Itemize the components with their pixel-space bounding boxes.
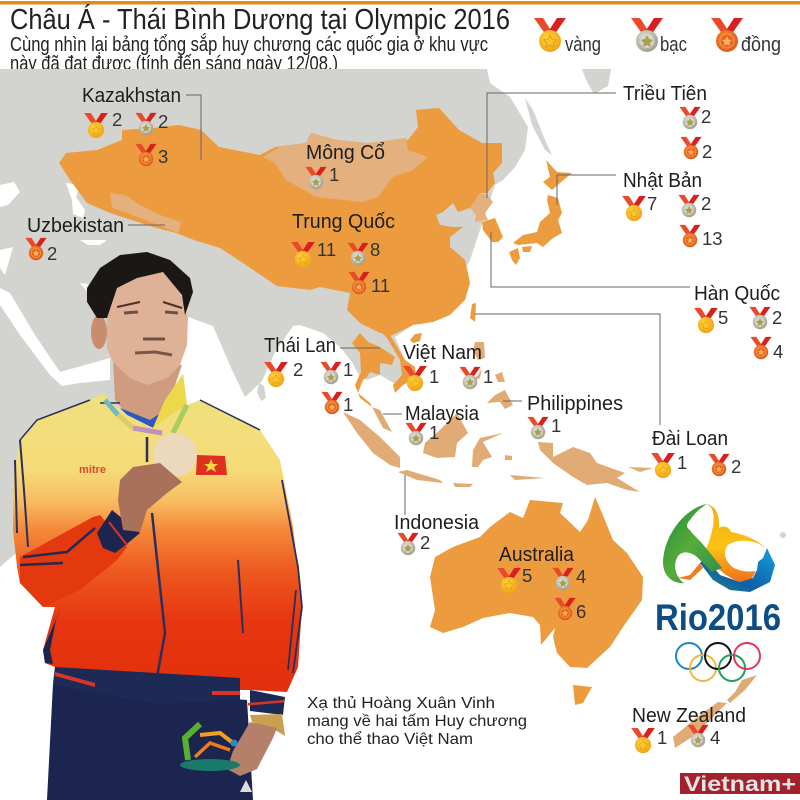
group: New Zealand: 1 (657, 727, 667, 748)
group: Australia: 4 (576, 566, 586, 587)
group: Indonesia: 2 (420, 532, 430, 553)
group: China: 11 (317, 239, 336, 260)
group: New Zealand: New Zealand (632, 705, 746, 727)
legend label silver: bạc (660, 34, 687, 56)
group: Australia: 6 (576, 601, 586, 622)
group: Malaysia: Malaysia (405, 403, 480, 425)
lower hand (227, 722, 277, 776)
group: Philippines: 1 (551, 415, 561, 436)
logo emblem (663, 504, 775, 592)
face features (117, 302, 182, 355)
map: seas (0, 182, 110, 386)
icon: bronze medal legend (711, 18, 743, 52)
cuff red stripe (109, 522, 127, 545)
icon: gold medal legend (534, 18, 566, 52)
forearm sleeve (20, 515, 127, 607)
group: Kazakhstan: Kazakhstan (82, 85, 181, 107)
group: Mongolia (305, 142, 385, 189)
group: South Korea: 2 (772, 307, 782, 328)
group: Thailand: 1 (343, 359, 353, 380)
group: Thailand: 2 (293, 359, 303, 380)
brand label: mitre (79, 464, 106, 476)
Vietnam+ logo: Vietnam+ (684, 773, 796, 796)
group: Malaysia (405, 403, 480, 445)
group: Japan (622, 170, 723, 249)
group: Australia (497, 544, 586, 622)
jacket stripes (15, 400, 302, 677)
subtitle: Cùng nhìn lại bảng tổng sắp huy chương các quốc gia ở khu vực (10, 33, 488, 56)
group: Kazakhstan (82, 85, 181, 167)
head: hair (87, 252, 193, 318)
top orange bar (0, 1, 800, 4)
map: Philippines (470, 342, 513, 409)
map: Malaysia and Indonesia (343, 407, 653, 492)
collar right (153, 374, 187, 428)
group: Japan: 7 (647, 193, 657, 214)
group: Kazakhstan: 3 (158, 146, 168, 167)
map: Uzbekistan (110, 193, 181, 233)
caption: Xạ thủ Hoàng Xuân Vinh (307, 695, 495, 712)
blue undershirt (120, 408, 162, 428)
right cuff stripe (248, 700, 284, 706)
olympic medal (153, 433, 197, 477)
subtitle: này đã đạt được (tính đến sáng ngày 12/08.) (10, 53, 338, 75)
legend label gold: vàng (565, 34, 601, 56)
group: Thailand: Thái Lan (264, 335, 336, 357)
title: Châu Á - Thái Bình Dương tại Olympic 2016 (10, 3, 510, 36)
group: Taiwan (651, 428, 741, 478)
group: Vietnam: 1 (429, 366, 439, 387)
group: South Korea: Hàn Quốc (694, 283, 780, 305)
pants (47, 684, 253, 800)
map: China, Kazakhstan and neighbours (59, 108, 502, 336)
group: Australia: Australia (499, 544, 575, 566)
group: Japan: Nhật Bản (623, 170, 702, 192)
group: Thailand: 1 (343, 394, 353, 415)
map: South Korea (482, 218, 503, 242)
flag of Vietnam (196, 455, 227, 475)
group: Taiwan: 2 (731, 456, 741, 477)
Rio 2016 logo (655, 504, 781, 681)
caption: cho thể thao Việt Nam (307, 730, 473, 748)
head: face (107, 270, 188, 385)
subtitle (10, 33, 488, 75)
group: New Zealand: 4 (710, 727, 720, 748)
logo wordmark: Rio2016 (655, 597, 781, 638)
legend (534, 18, 781, 56)
map: Thailand (352, 333, 395, 407)
map: Tasmania (573, 685, 592, 705)
hem red bits (55, 672, 240, 695)
olympic rings (676, 643, 760, 681)
group: Taiwan: Đài Loan (652, 428, 728, 450)
group: Kazakhstan: 2 (112, 109, 122, 130)
group: South Korea: 5 (718, 307, 728, 328)
group: Japan: 2 (701, 193, 711, 214)
group: Thailand (264, 335, 353, 415)
group: Vietnam: Việt Nam (403, 342, 482, 364)
group: Uzbekistan: Uzbekistan (27, 215, 124, 237)
map: Vietnam (375, 325, 416, 393)
group: Vietnam: 1 (483, 366, 493, 387)
head: ear (91, 315, 107, 349)
map: New Zealand (673, 675, 757, 748)
hem band (53, 667, 240, 704)
group: Indonesia: Indonesia (394, 512, 480, 534)
group: Vietnam (403, 342, 493, 391)
icon: silver medal legend (631, 18, 663, 52)
adidas mark (240, 780, 252, 792)
group: North Korea: 2 (701, 106, 711, 127)
map: Australia (430, 497, 643, 668)
group: Taiwan: 1 (677, 452, 687, 473)
medal ribbon (105, 400, 187, 433)
group: New Zealand (631, 705, 746, 753)
group: China: Trung Quốc (292, 211, 395, 233)
group: Mongolia: Mông Cổ (306, 142, 385, 164)
group: China: 8 (370, 239, 380, 260)
map: grey land (0, 69, 786, 567)
sleeve cuff (97, 510, 140, 553)
group: Philippines (527, 393, 623, 439)
group: South Korea (694, 283, 783, 362)
legend label bronze: đồng (741, 34, 781, 56)
caption: mang về hai tấm Huy chương (307, 713, 527, 730)
group: Indonesia (394, 512, 480, 555)
group: Mongolia: 1 (329, 164, 339, 185)
group: North Korea: 2 (702, 141, 712, 162)
group: China (291, 211, 395, 296)
group: Uzbekistan: 2 (47, 243, 57, 264)
neck (113, 360, 182, 422)
trophy mascot (180, 724, 240, 771)
forearm stripes (20, 528, 95, 565)
group: Japan: 13 (702, 228, 723, 249)
map: Mongolia (263, 133, 428, 202)
group: South Korea: 4 (773, 341, 783, 362)
group: Malaysia: 1 (429, 422, 439, 443)
group: North Korea: Triều Tiên (623, 83, 707, 105)
group: North Korea (623, 83, 712, 162)
group: China: 11 (371, 275, 390, 296)
athlete figure (13, 252, 302, 800)
group: Kazakhstan: 2 (158, 111, 168, 132)
caption (307, 695, 527, 748)
group: Australia: 5 (522, 565, 532, 586)
map: North Korea (470, 193, 493, 222)
group: Philippines: Philippines (527, 393, 623, 415)
jacket (13, 374, 302, 692)
right cuff (250, 690, 285, 715)
watch (250, 714, 285, 736)
left side dark panel (43, 605, 62, 664)
leader lines (128, 93, 690, 515)
map: Hainan (410, 333, 422, 343)
map: Taiwan (470, 303, 476, 322)
group: Uzbekistan (25, 215, 124, 264)
hand holding medal (118, 463, 182, 532)
map: Japan (509, 160, 572, 265)
